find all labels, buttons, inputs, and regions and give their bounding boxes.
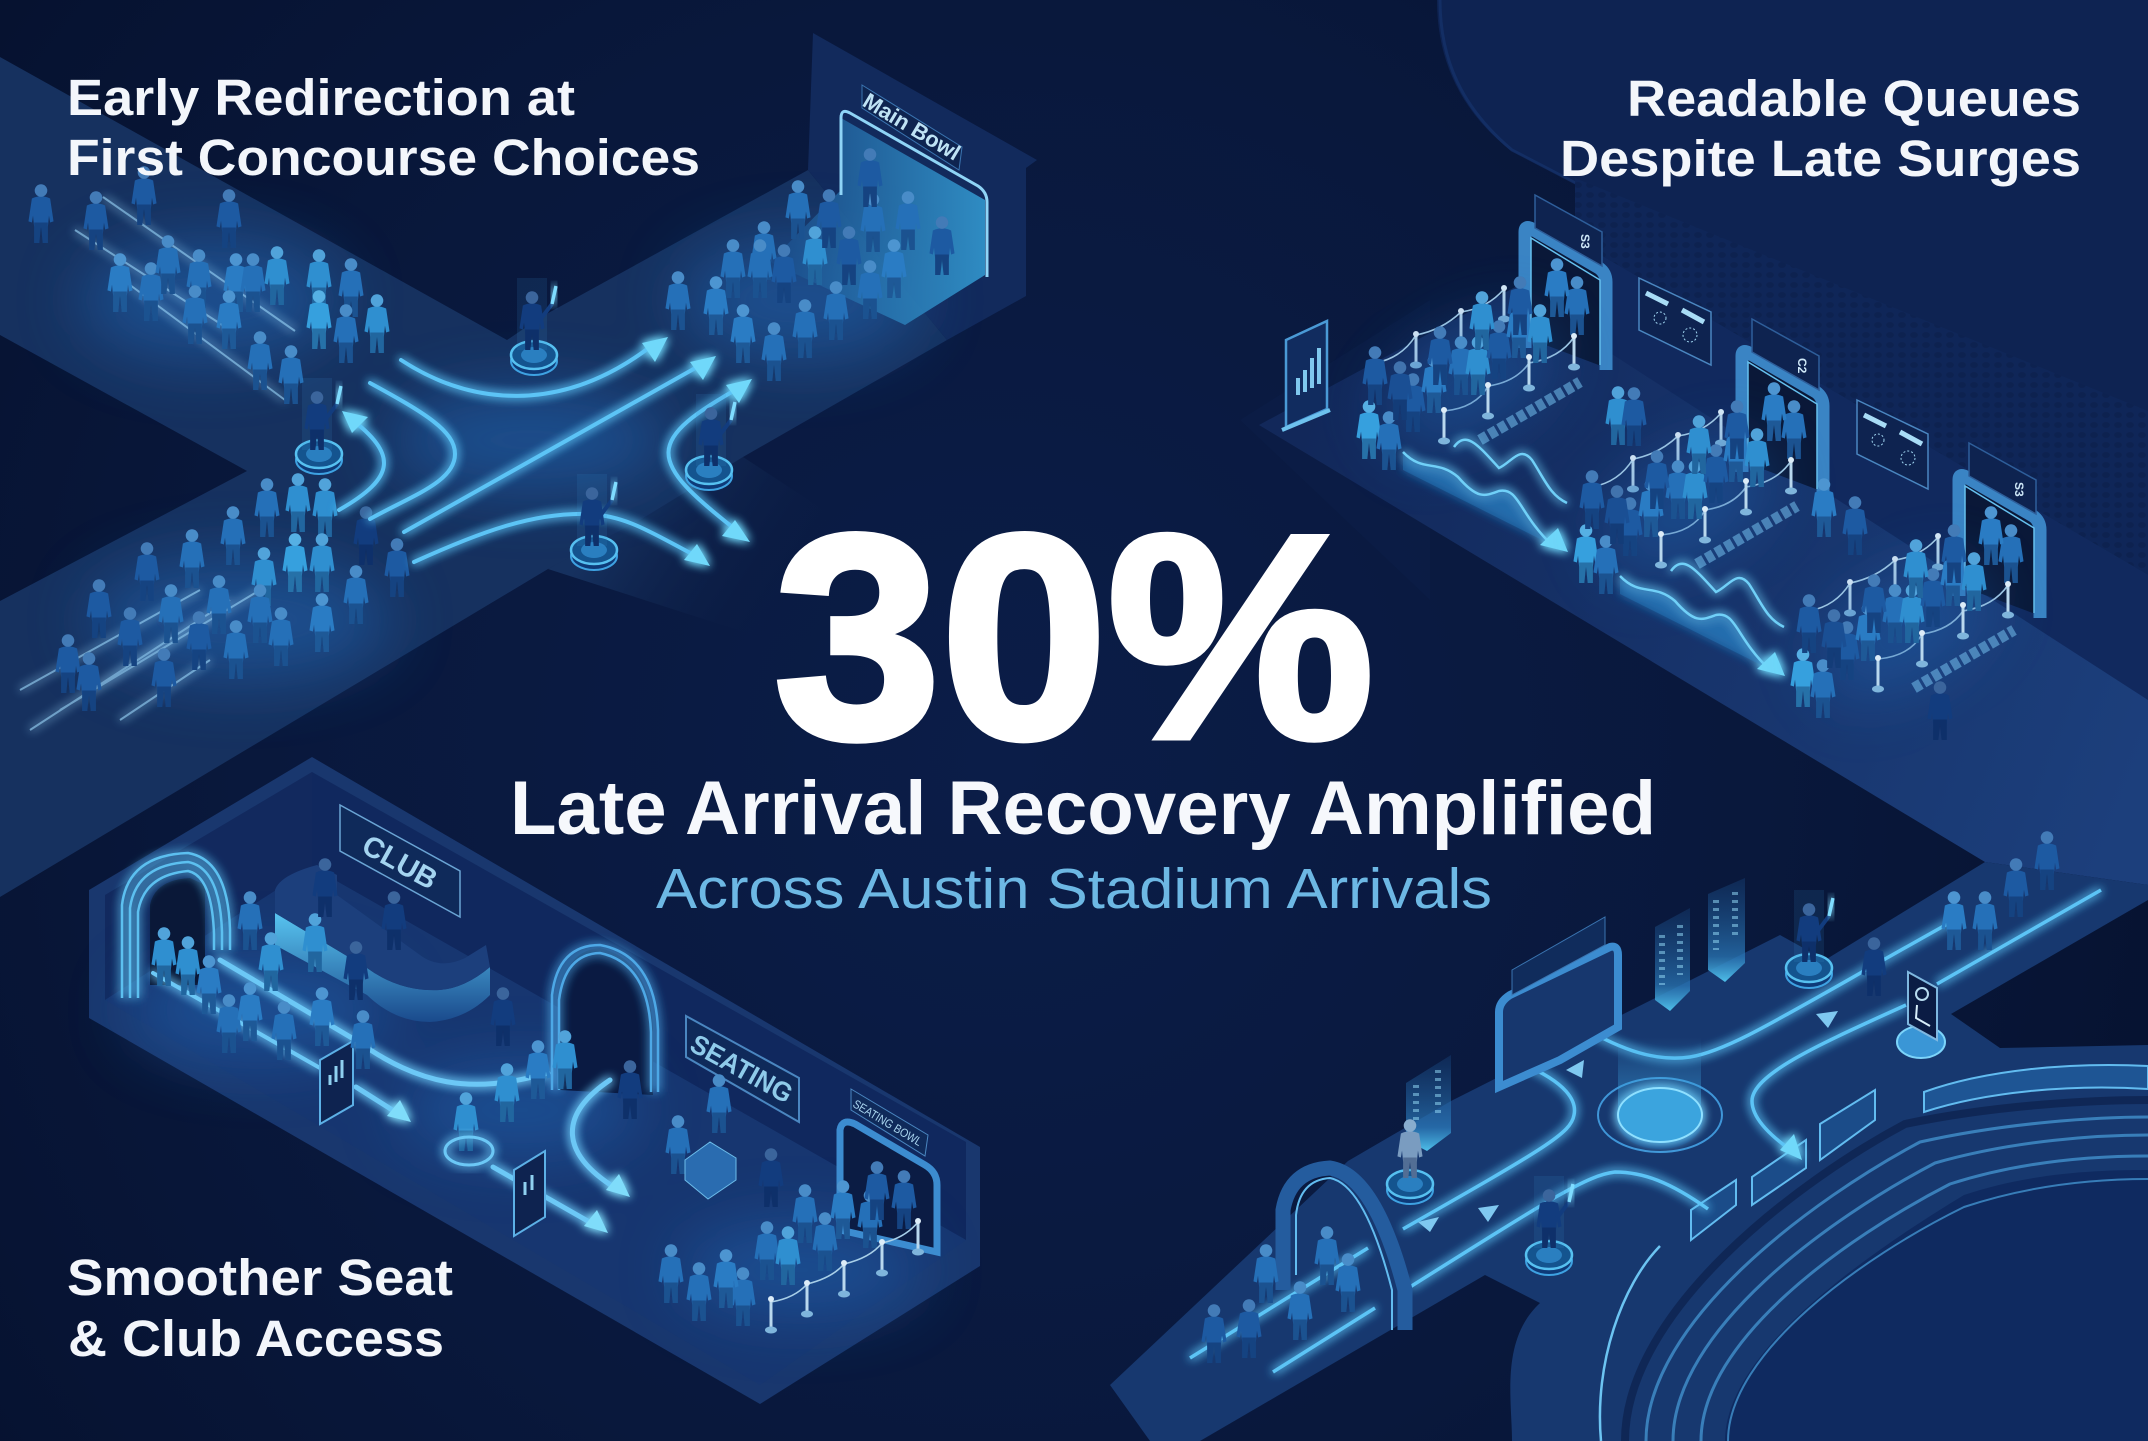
lane three <box>1790 443 2046 724</box>
wall panel: status two <box>1857 400 1928 489</box>
lane two: C2 <box>1795 358 1809 374</box>
crowd bloom <box>80 240 920 680</box>
room floor <box>105 867 966 1385</box>
seating sign: SEATING <box>685 1029 798 1109</box>
panel: stadium arrival plaza <box>1110 831 2148 1441</box>
queue ropes <box>765 1218 924 1334</box>
reception desk <box>275 865 490 1022</box>
left wall <box>105 772 312 1000</box>
holographic panels <box>1406 878 1745 1151</box>
guard stations <box>296 278 735 570</box>
standee: queue display <box>1282 321 1330 430</box>
main bowl sign: Main Bowl <box>859 88 965 165</box>
main bowl gate <box>770 85 987 325</box>
low fences <box>1691 1090 1875 1240</box>
lane one <box>1356 195 1612 552</box>
heading: readable queues: Despite Late Surges <box>1560 130 2081 187</box>
heading: smoother seat: & Club Access <box>68 1310 444 1367</box>
stadium track <box>1600 1065 2148 1441</box>
central stat: 30%: 30% <box>774 475 1374 799</box>
seating bowl gate: SEATING BOWL <box>850 1097 925 1149</box>
concourse floor <box>0 57 947 897</box>
wayfinding arrows <box>356 1080 630 1233</box>
heading: smoother seat: Smoother Seat <box>67 1249 453 1306</box>
queue hall floor <box>1259 240 2148 885</box>
floor chevrons <box>1418 1011 1838 1232</box>
wall panel: status one <box>1639 278 1711 365</box>
heading: readable queues <box>1560 70 2081 187</box>
entry gate <box>1499 917 1618 1087</box>
panel: club and seating room <box>89 757 980 1404</box>
floor guide line <box>153 960 548 1084</box>
seating queue <box>658 1161 917 1326</box>
backdrop: stadium bowl upper right <box>1240 0 2148 600</box>
back wall <box>1519 240 2148 700</box>
lane one: S3 <box>1578 234 1592 249</box>
light streaks on arms <box>20 197 295 730</box>
central title: Late Arrival Recovery Amplified <box>510 766 1656 851</box>
crowd: northeast arm <box>665 148 955 381</box>
redirection arrows <box>339 337 752 566</box>
arch: seating entry <box>552 945 658 1095</box>
panel: early redirection concourse crossroads <box>0 33 1037 897</box>
heading: smoother seat <box>67 1249 453 1367</box>
room bloom <box>130 960 920 1315</box>
staff <box>1605 386 1953 740</box>
plaza floor <box>1110 862 2148 1441</box>
back wall <box>312 772 966 1240</box>
crowd: southwest arm <box>55 473 410 711</box>
panel: readable queues floor and lanes <box>1259 195 2148 885</box>
plaza people <box>1201 831 2060 1363</box>
heading: readable queues: Readable Queues <box>1627 70 2081 127</box>
lane two <box>1573 319 1829 676</box>
floor beacon <box>445 1137 493 1165</box>
heading: early redirection: First Concourse Choices <box>67 129 700 186</box>
end wall: main bowl <box>808 33 1037 340</box>
club sign: CLUB <box>357 829 442 896</box>
central wayfinding beacon <box>1598 1037 1722 1152</box>
club people <box>151 858 784 1207</box>
arch: club entry <box>122 853 230 998</box>
kiosk sign <box>1897 972 1945 1058</box>
seating bowl gate <box>840 1089 937 1252</box>
guide lines <box>1190 890 2101 1372</box>
lane three: S3 <box>2012 482 2026 497</box>
crowd: northwest arm <box>28 166 390 404</box>
plaza guards <box>1387 890 1833 1275</box>
standees <box>320 1041 545 1236</box>
heading: early redirection <box>67 69 700 186</box>
small help desk <box>685 1142 736 1199</box>
room slab <box>89 757 980 1404</box>
heading: early redirection: Early Redirection at <box>67 69 575 126</box>
southeast arm fading out <box>548 457 900 650</box>
club sign <box>340 805 460 917</box>
central subtitle: Across Austin Stadium Arrivals <box>656 857 1492 921</box>
entry arch <box>1283 1168 1405 1330</box>
